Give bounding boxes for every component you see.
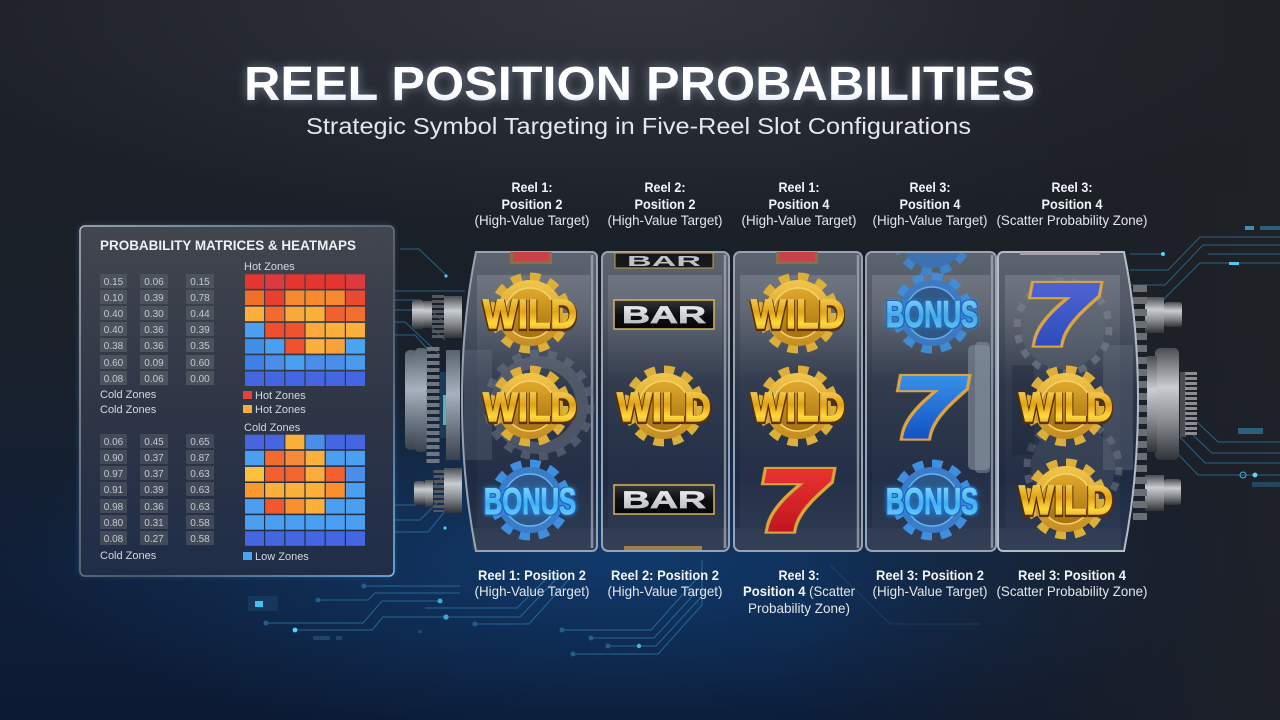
left axle mechanism (405, 295, 462, 513)
symbol: wild (1019, 463, 1113, 535)
top reel labels: Reel 2: (644, 179, 686, 195)
matrix: top values: 0.60 (190, 358, 210, 369)
symbol: bonus: BONUS (886, 294, 978, 335)
top reel labels: Position 4 (1042, 196, 1103, 212)
matrix: bottom values: 0.97 (104, 469, 124, 480)
matrix: bottom values: 0.58 (190, 534, 210, 545)
top reel labels: Position 4 (900, 196, 961, 212)
matrix: top values: 0.39 (190, 325, 210, 336)
matrix: top values: 0.15 (190, 277, 210, 288)
top reel labels: (High-Value Target) (872, 212, 988, 228)
title: REEL POSITION PROBABILITIES (244, 58, 1035, 111)
symbol: wild (617, 370, 711, 442)
matrix: top values: 0.40 (104, 325, 124, 336)
matrix: bottom values: 0.37 (144, 453, 164, 464)
matrix: top values: 0.08 (104, 374, 124, 385)
matrix: bottom values: 0.80 (104, 518, 124, 529)
matrix: bottom values: 0.31 (144, 518, 164, 529)
symbol: bar (614, 300, 714, 329)
matrix: bottom values: 0.39 (144, 485, 164, 496)
symbol: bonus (484, 464, 576, 536)
top reel labels: Position 2 (634, 196, 696, 212)
clipped top bar (615, 253, 713, 270)
symbol: blue seven: 7 (886, 360, 973, 454)
reels (461, 251, 1139, 552)
top reel labels: Reel 3: (1052, 179, 1092, 195)
clipped top bonus (896, 253, 967, 276)
heatmap label: hot zones: Hot Zones (244, 261, 295, 273)
bottom reel labels: (High-Value Target) (872, 583, 988, 599)
bottom reel labels: Reel 3: Position 4 (1018, 567, 1126, 583)
symbol: wild (1019, 370, 1113, 442)
reel 5 (998, 252, 1138, 551)
matrix: top values: 0.06 (144, 374, 164, 385)
matrix: bottom values: 0.63 (190, 469, 210, 480)
top reel labels: Reel 3: (910, 179, 950, 195)
symbol: wild: WILD (617, 384, 711, 430)
matrix: bottom values: 0.63 (190, 502, 210, 513)
matrix: bottom values (100, 434, 214, 545)
matrix: top values: 0.10 (104, 293, 124, 304)
matrix: bottom values: 0.36 (144, 502, 164, 513)
matrix: top values: 0.35 (190, 341, 210, 352)
symbol: wild: WILD (1019, 477, 1113, 523)
background gear lower (1027, 421, 1119, 513)
top reel labels: (Scatter Probability Zone) (996, 212, 1148, 228)
matrix: bottom values: 0.27 (144, 534, 164, 545)
matrix: top values: 0.60 (104, 358, 124, 369)
heatmap label: cold zones: Cold Zones (244, 422, 301, 434)
matrix: bottom values: 0.87 (190, 453, 210, 464)
symbol: bar: BAR (622, 487, 706, 514)
top reel labels: Position 2 (502, 196, 563, 212)
clipped top symbol (776, 252, 818, 264)
bottom reel labels (474, 567, 1148, 616)
bottom reel labels: (Scatter Probability Zone) (996, 583, 1148, 599)
matrix: top values: 0.09 (144, 358, 164, 369)
top reel labels: Reel 1: (512, 179, 552, 195)
matrix: bottom values: 0.98 (104, 502, 124, 513)
axle hub through glass (464, 350, 492, 460)
reel 1 (462, 252, 597, 551)
matrix: top values: 0.38 (104, 341, 124, 352)
symbol: red seven: 7 (751, 453, 838, 547)
matrix: top values: 0.15 (104, 277, 124, 288)
top reel labels: (High-Value Target) (608, 212, 722, 228)
matrix: bottom values: 0.91 (104, 485, 124, 496)
symbol: bonus: BONUS (484, 481, 576, 522)
bottom reel labels: (High-Value Target) (474, 583, 590, 599)
clipped top symbol (510, 252, 552, 264)
matrix: bottom values: 0.90 (104, 453, 124, 464)
symbol: wild (751, 370, 845, 442)
heatmap: top (245, 274, 365, 386)
subtitle: Strategic Symbol Targeting in Five-Reel Slot Configurations (306, 113, 971, 139)
matrix: bottom values: 0.45 (144, 437, 164, 448)
matrix: bottom values: 0.65 (190, 437, 210, 448)
right axle mechanism (1140, 285, 1191, 520)
matrix: top values: 0.78 (190, 293, 210, 304)
matrix: top values: 0.44 (190, 309, 210, 320)
matrix: bottom values: 0.06 (104, 437, 124, 448)
top reel labels (474, 179, 1148, 228)
axle hub through glass (1012, 345, 1133, 470)
legend: low zones: Low Zones (255, 551, 309, 563)
circuit lines: right (1130, 226, 1280, 487)
inner gear ring (496, 362, 582, 448)
symbol: wild: WILD (1019, 384, 1113, 430)
panel: probability matrices and heatmaps (79, 225, 394, 576)
matrix: top values: 0.36 (144, 341, 164, 352)
symbol: wild (483, 277, 577, 349)
caption: cold zones second: Cold Zones (100, 404, 157, 416)
symbol: wild: WILD (751, 291, 845, 337)
symbol: bonus (886, 464, 978, 536)
reel 4 (865, 251, 997, 552)
matrix: top values: 0.06 (144, 277, 164, 288)
matrix: top values (100, 274, 214, 385)
bottom reel labels: Probability Zone) (748, 600, 850, 616)
top reel labels: (High-Value Target) (474, 212, 590, 228)
symbol: wild: WILD (751, 384, 845, 430)
bottom reel labels: (High-Value Target) (608, 583, 722, 599)
symbol: wild: WILD (483, 291, 577, 337)
bottom reel labels: Reel 2: Position 2 (611, 567, 719, 583)
matrix: bottom values: 0.63 (190, 485, 210, 496)
matrix: bottom values: 0.58 (190, 518, 210, 529)
matrix: top values: 0.00 (190, 374, 210, 385)
reel 3 (734, 252, 862, 551)
bottom reel labels: Reel 3: Position 2 (876, 567, 984, 583)
panel heading: PROBABILITY MATRICES & HEATMAPS (100, 238, 356, 253)
bottom reel labels: Reel 3: (778, 567, 820, 583)
clipped bottom symbol (624, 546, 702, 550)
axle disc through glass (968, 342, 990, 473)
clipped top symbol (1020, 252, 1100, 255)
caption: cold zones: Cold Zones (100, 389, 157, 401)
symbol: bar (614, 485, 714, 514)
reel 2 (602, 252, 729, 551)
background gear upper (1017, 281, 1109, 373)
top reel labels: Position 4 (768, 196, 830, 212)
heatmap: bottom (245, 435, 365, 546)
bottom reel labels: Reel 1: Position 2 (478, 567, 586, 583)
matrix: top values: 0.40 (104, 309, 124, 320)
symbol: purple-blue seven: 7 (1018, 267, 1105, 361)
title: REEL POSITION PROBABILITIES (244, 58, 1035, 111)
symbol: wild (751, 277, 845, 349)
matrix: top values: 0.30 (144, 309, 164, 320)
legend: hot zones red: Hot Zones (255, 390, 306, 402)
circuit lines: left (360, 249, 465, 532)
symbol: wild (483, 370, 577, 442)
symbol: bonus: BONUS (886, 481, 978, 522)
clipped top bar: BAR (627, 253, 701, 270)
symbol: bonus (886, 277, 978, 349)
bottom reel labels: Position 4 (Scatter (743, 583, 855, 599)
matrix: bottom values: 0.08 (104, 534, 124, 545)
top reel labels: Reel 1: (778, 179, 820, 195)
legend: hot zones orange: Hot Zones (255, 404, 306, 416)
symbol: wild: WILD (483, 384, 577, 430)
matrix: top values: 0.36 (144, 325, 164, 336)
top reel labels: (High-Value Target) (742, 212, 856, 228)
background gear (487, 353, 591, 457)
circuit lines: bottom (248, 560, 980, 656)
caption: cold zones bottom: Cold Zones (100, 550, 157, 562)
matrix: bottom values: 0.37 (144, 469, 164, 480)
symbol: bar: BAR (622, 302, 706, 329)
matrix: top values: 0.39 (144, 293, 164, 304)
